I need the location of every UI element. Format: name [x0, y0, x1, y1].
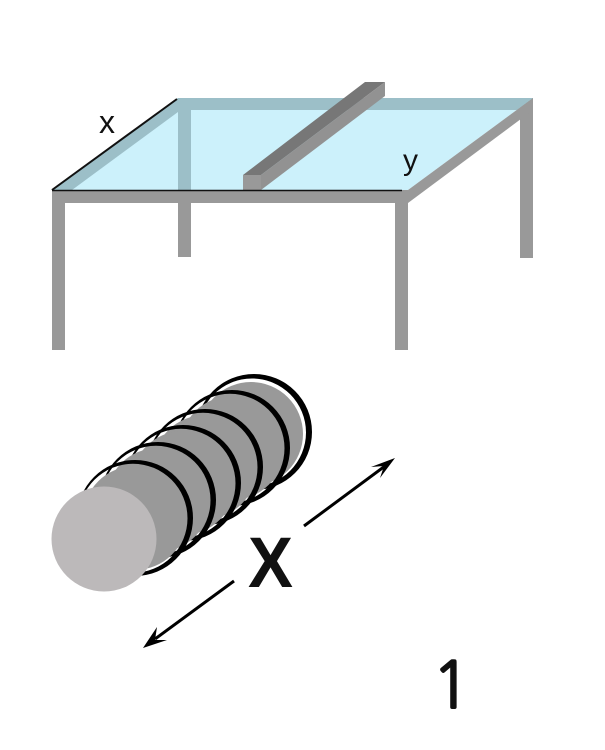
arrow: down left [143, 581, 234, 648]
disc 5 [174, 390, 290, 506]
disc 1 [77, 460, 193, 576]
diagram: stack of discs [52, 374, 312, 592]
right rail [408, 98, 533, 203]
glass table top [52, 98, 533, 190]
back disc with ring [196, 374, 312, 490]
disc 4 [147, 409, 263, 525]
front legs and rail [52, 190, 408, 350]
arrow: up right [304, 458, 395, 526]
label: figure number: 1 [432, 654, 471, 718]
back legs [178, 98, 533, 258]
front disc [52, 486, 156, 592]
label: large X: X [248, 524, 293, 603]
edge lines [52, 99, 402, 190]
label: y: y [403, 144, 418, 177]
diagram: table with divider [52, 82, 533, 350]
back rail seen through glass [52, 98, 533, 191]
divider bar [243, 82, 385, 190]
disc 3 [125, 425, 241, 541]
disc 2 [100, 442, 216, 558]
label: x: x [99, 104, 115, 140]
